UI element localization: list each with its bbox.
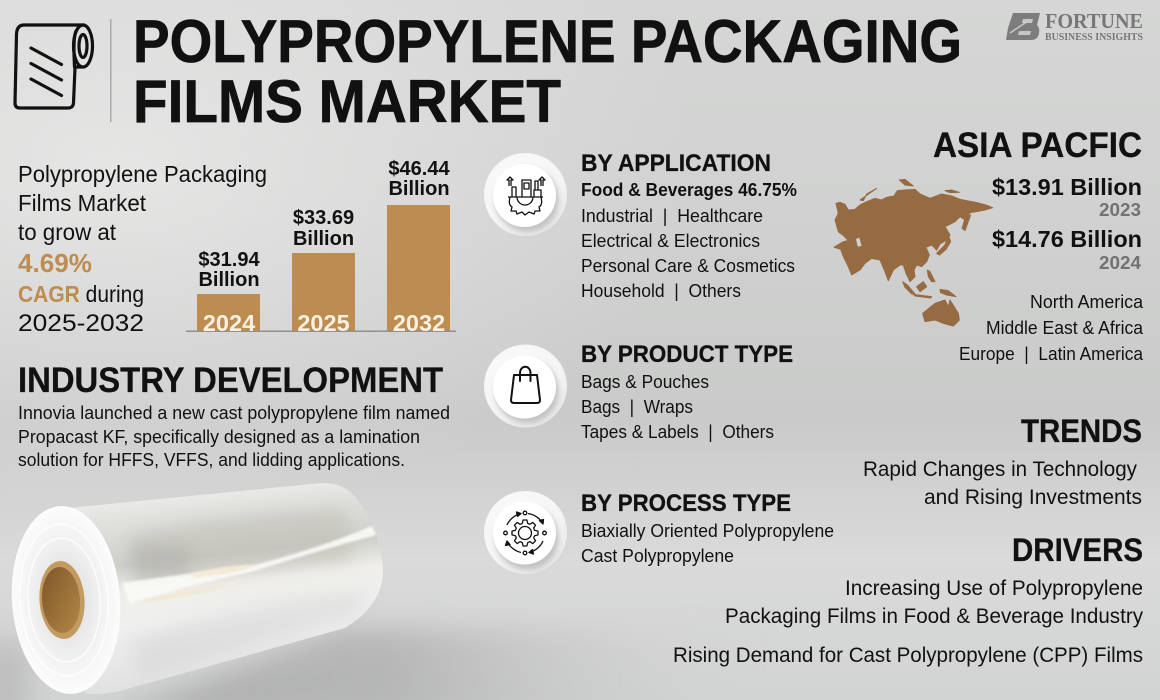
process type list: Cast Polypropylene: [581, 546, 734, 566]
icon: film roll: [15, 25, 92, 108]
other regions list: [959, 292, 1144, 364]
text: industry development body: solution for HFFS, VFFS, and lidding applications.: [18, 450, 405, 470]
text: market growth summary: 4.69%: [18, 248, 92, 278]
bar chart: market size: $31.94: [198, 249, 260, 271]
text: market growth summary: to grow at: [18, 219, 117, 245]
text: industry development body: Innovia launched a new cast polypropylene film named: [18, 403, 450, 423]
other regions list: Middle East & Africa: [986, 318, 1144, 338]
image: polypropylene film roll: [6, 483, 383, 698]
text: industry development body: [18, 403, 450, 470]
text: drivers: Packaging Films in Food & Beverage Industry: [725, 605, 1143, 628]
regional market values: $13.91 Billion: [992, 174, 1142, 200]
text: trends: [863, 458, 1142, 509]
bar chart: market size: [186, 158, 456, 336]
title: FILMS MARKET: [133, 68, 561, 135]
bar 2025: [292, 253, 355, 331]
process type list: [581, 521, 834, 566]
regional market values: $14.76 Billion: [992, 226, 1142, 252]
bar chart: market size: 2024: [203, 310, 255, 336]
bar 2024: [197, 294, 260, 331]
product type list: Bags | Wraps: [581, 397, 693, 417]
text: drivers: [673, 577, 1143, 667]
process type list: Biaxially Oriented Polypropylene: [581, 521, 834, 541]
logo: Fortune Business Insights: [1006, 9, 1143, 43]
bar chart: market size: $46.44: [388, 158, 450, 180]
heading: industry development: INDUSTRY DEVELOPMENT: [18, 361, 443, 400]
icon: shopping bag: [484, 344, 567, 428]
panel: by product type: [484, 341, 793, 442]
bar chart: market size: Billion: [198, 269, 260, 291]
map: Asia Pacific: [834, 179, 993, 326]
text: market growth summary: CAGR during: [18, 281, 144, 307]
text: trends: Rapid Changes in Technology: [863, 458, 1137, 481]
bar 2032: [387, 205, 450, 331]
text: market growth summary: Films Market: [18, 190, 147, 216]
text: industry development body: Propacast KF, specifically designed as a lamination: [18, 427, 420, 447]
application list: [581, 180, 797, 301]
title: POLYPROPYLENE PACKAGING: [133, 8, 962, 75]
regional market values: 2023: [1099, 200, 1141, 220]
heading: by process type: BY PROCESS TYPE: [581, 490, 791, 517]
bar chart: market size: 2025: [297, 310, 350, 336]
other regions list: Europe | Latin America: [959, 344, 1144, 364]
heading: asia pacific: ASIA PACFIC: [933, 126, 1142, 165]
heading: drivers: DRIVERS: [1012, 532, 1143, 568]
heading: trends: TRENDS: [1021, 413, 1142, 449]
text: market growth summary: Polypropylene Packaging: [18, 161, 267, 187]
application list: Industrial | Healthcare: [581, 206, 763, 226]
panel: by process type: [484, 490, 834, 574]
heading: by product type: BY PRODUCT TYPE: [581, 341, 793, 368]
regional market values: [992, 174, 1142, 273]
product type list: Bags & Pouches: [581, 372, 709, 392]
text: market growth summary: [18, 161, 267, 337]
bar chart: market size: Billion: [293, 228, 354, 250]
application list: Household | Others: [581, 281, 741, 301]
text: market growth summary: 2025-2032: [18, 310, 144, 337]
title: [133, 8, 962, 135]
bar chart: market size: 2032: [393, 310, 445, 336]
text: drivers: Rising Demand for Cast Polypropylene (CPP) Films: [673, 644, 1143, 667]
application list: Electrical & Electronics: [581, 231, 760, 251]
bar chart: market size: Billion: [388, 178, 450, 200]
product type list: Tapes & Labels | Others: [581, 422, 774, 442]
icon: process gear: [484, 491, 567, 574]
application list: Personal Care & Cosmetics: [581, 256, 795, 276]
application list: Food & Beverages 46.75%: [581, 180, 797, 200]
product type list: [581, 372, 774, 442]
logo: Fortune Business Insights: BUSINESS INSIGHTS: [1045, 32, 1143, 43]
panel: by application: [484, 150, 797, 301]
bar chart: market size: $33.69: [293, 207, 354, 229]
text: drivers: Increasing Use of Polypropylene: [845, 577, 1143, 600]
regional market values: 2024: [1099, 253, 1141, 273]
icon: industrial gear: [484, 153, 567, 236]
other regions list: North America: [1030, 292, 1144, 312]
heading: by application: BY APPLICATION: [581, 150, 771, 177]
logo: Fortune Business Insights: FORTUNE: [1045, 9, 1143, 33]
text: trends: and Rising Investments: [924, 486, 1142, 509]
